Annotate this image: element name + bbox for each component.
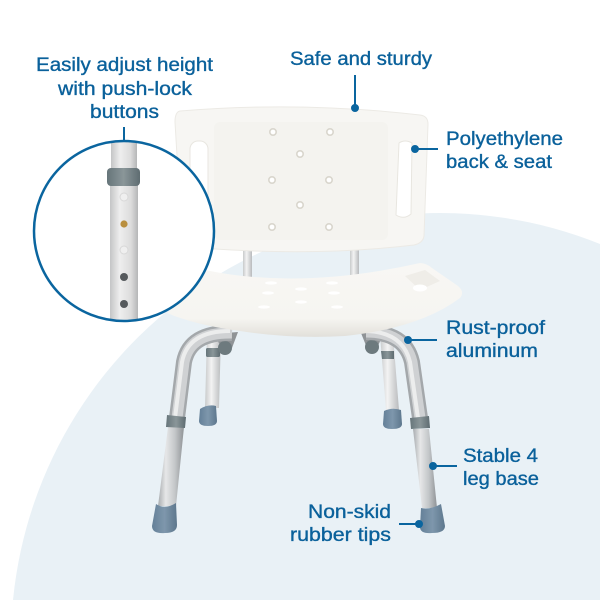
label: easily adjust height: with push-lock <box>57 79 193 100</box>
seat <box>167 263 462 337</box>
label: stable 4 leg base: Stable 4 <box>463 446 538 467</box>
label: easily adjust height <box>36 55 214 123</box>
leader: height adjust <box>123 127 125 141</box>
label: stable 4 leg base <box>463 446 539 490</box>
label: non-skid rubber tips <box>290 502 391 546</box>
rear left leg <box>199 332 238 426</box>
label: polyethylene back and seat: back & seat <box>446 152 553 173</box>
label: rust-proof aluminum: Rust-proof <box>446 318 546 339</box>
front right leg <box>366 331 445 533</box>
leader: safe and sturdy <box>352 75 358 112</box>
background circle <box>13 213 600 600</box>
label: rust-proof aluminum <box>446 318 546 362</box>
label: safe and sturdy: Safe and sturdy <box>290 49 433 70</box>
label: stable 4 leg base: leg base <box>463 469 539 490</box>
leader: leg base <box>430 462 457 470</box>
label: easily adjust height: buttons <box>90 102 159 123</box>
front left leg <box>152 331 232 533</box>
back posts <box>243 248 359 278</box>
leader: aluminum <box>404 336 437 344</box>
label: non-skid rubber tips: Non-skid <box>308 502 391 523</box>
label: polyethylene back and seat: Polyethylene <box>446 129 563 150</box>
leader: polyethylene <box>412 146 438 152</box>
label: non-skid rubber tips: rubber tips <box>290 525 391 546</box>
seat back <box>175 107 428 252</box>
chair <box>152 107 462 533</box>
rear right leg <box>361 332 402 429</box>
detail circle: push-lock buttons <box>34 141 214 321</box>
label: easily adjust height: Easily adjust height <box>36 55 214 76</box>
label: polyethylene back and seat <box>446 129 563 173</box>
leader: rubber tips <box>399 520 422 528</box>
label: rust-proof aluminum: aluminum <box>446 341 538 362</box>
tube close-up <box>107 142 140 320</box>
